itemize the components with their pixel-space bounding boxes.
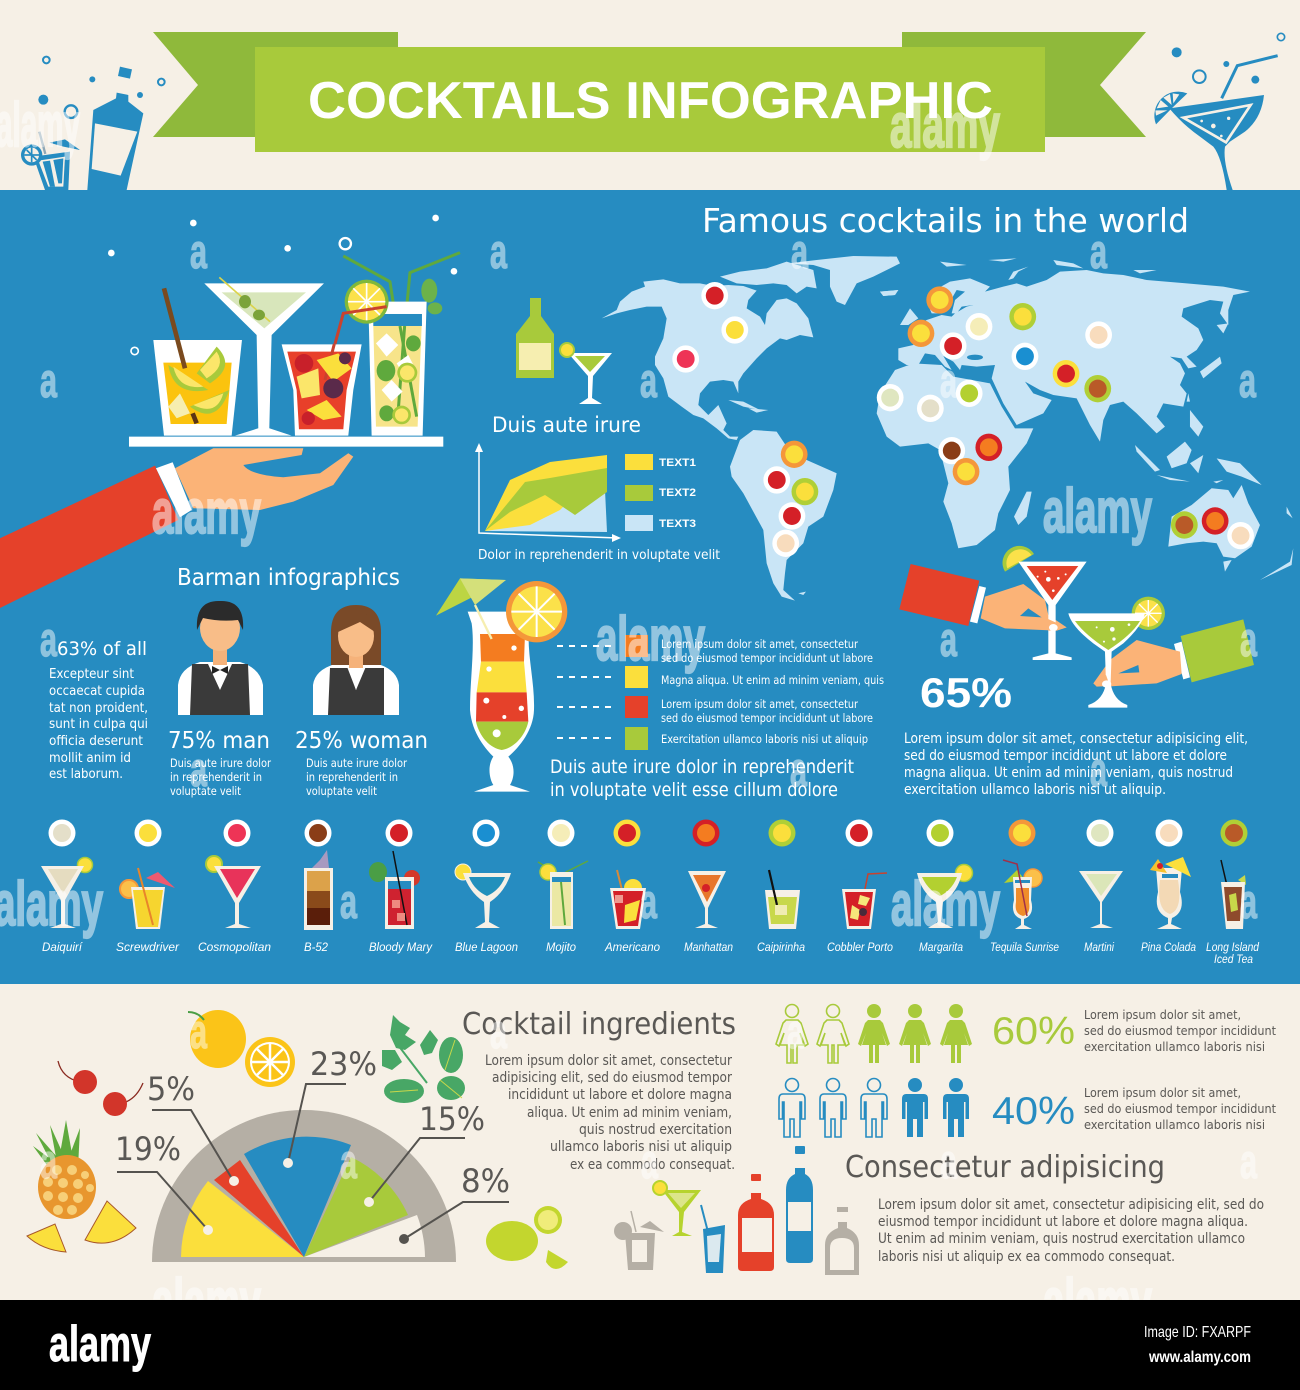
blue tumbler [701,1205,725,1273]
text block: consectetur: Ut enim ad minim veniam, quis nostrud exercitation ullamco [878,1231,1245,1247]
stock photo watermarks: a [940,355,957,408]
cocktail names: Blue Lagoon [455,942,518,954]
cocktail names: Margarita [919,942,963,954]
text block: 40% description [1084,1085,1277,1132]
cocktail names: Manhattan [684,942,733,954]
icon: lime and slices [486,1206,568,1269]
stock photo watermarks: alamy [891,870,1000,939]
pictogram row: women 60% [776,1004,972,1063]
icon: Manhattan [688,871,726,928]
stock photo watermarks: a [1090,744,1107,797]
text block: 63% of all: sunt in culpa qui [49,717,148,732]
bubbles [108,215,457,355]
stat: 60%: 60% [992,1010,1075,1053]
stat: 40%: 40% [992,1090,1075,1133]
chart caption: Dolor in reprehenderit in voluptate velit [478,547,720,563]
text block: 65% description: magna aliqua. Ut enim ad minim veniam, quis nostrud [904,765,1233,781]
text block: 63% of all [49,638,148,782]
map markers [672,282,1254,557]
text block: man description: in reprehenderit in [170,770,262,784]
cocktail names: Mojito [546,942,577,954]
legend text: Lorem ipsum dolor sit amet, consectetur [661,697,859,711]
text block: 63% of all: Excepteur sint [49,667,134,682]
title banner [153,32,1146,152]
stock photo watermarks: alamy [596,605,705,674]
gauge leader lines and dots [117,1084,509,1244]
stock photo watermarks: a [1240,614,1257,667]
gauge percentage labels: 23% [310,1045,377,1083]
stock photo watermarks: a [40,1136,57,1189]
footer black bar overlay [0,1300,1300,1390]
stock photo watermarks: alamy [0,91,80,160]
text block: woman description: Duis aute irure dolor [306,756,408,770]
heading: Barman infographics: Barman infographics [177,565,400,591]
stat: 25% woman: 25% woman [295,728,428,754]
chart heading icons: bottle and glass [516,298,612,404]
gauge percentage labels: 15% [419,1100,485,1138]
stat: 65%: 65% [920,669,1012,716]
area chart [475,443,621,542]
chart legend: TEXT2 [659,487,696,499]
icon: pineapple and wedges [27,1120,136,1252]
cocktail names: Martini [1084,942,1114,954]
chart legend: TEXT3 [659,518,696,530]
text block: woman description [306,756,408,798]
stock photo watermarks: a [190,744,207,797]
subheading under hurricane glass [550,756,854,801]
glass: martini with olives [204,277,324,436]
stock photo watermarks: a [490,1006,507,1059]
text block: ingredients: aliqua. Ut enim ad minim veniam, [527,1105,732,1121]
subheading under hurricane glass: Duis aute irure dolor in reprehenderit [550,756,854,778]
text block: ingredients: incididunt ut labore et dolore magna [508,1087,732,1103]
cocktail names: Pina Colada [1141,942,1196,954]
text block: consectetur: laboris nisi ut aliquip ex ea commodo consequat. [878,1249,1175,1265]
section heading: famous cocktails: Famous cocktails in the world [702,201,1189,240]
heading: consectetur adipisicing: Consectetur adipisicing [845,1150,1165,1185]
icon: orange and slice [188,1010,295,1087]
text block: woman description: in reprehenderit in [306,770,398,784]
world map [602,256,1293,601]
gray tumbler with umbrella [614,1211,664,1270]
stock photo watermarks: a [340,1136,357,1189]
red sleeve and hand [899,564,1067,631]
stock photo watermarks: a [340,876,357,929]
legend text: Lorem ipsum dolor sit amet, consectetur [661,637,859,651]
cocktail names: Long Island [1206,942,1260,954]
text block: 65% description: Lorem ipsum dolor sit amet, consectetur adipisicing elit, [904,731,1248,747]
legend: dashed leaders and colour swatches [557,635,648,750]
text block: consectetur: eiusmod tempor incididunt ut labore et dolore magna aliqua. [878,1214,1248,1230]
cocktail names: Bloody Mary [369,942,433,954]
text block: 63% of all: 63% of all [57,638,147,660]
stock photo watermarks: a [641,1136,658,1189]
icon: bottle and tumbler, header left [21,57,165,190]
cocktail names [42,942,1260,966]
chart legend: TEXT1 [659,457,696,469]
heading: Duis aute irure: Duis aute irure [492,413,641,437]
arm and hand [0,448,353,608]
stock photo watermarks: a [40,614,57,667]
stock photo watermarks: alamy [152,1267,261,1336]
cocktail colour key dots [48,820,1248,846]
glass: red fruit cocktail [282,344,362,436]
icons: bottles and glasses [614,1146,859,1275]
main title: COCKTAILS INFOGRAPHIC [308,72,993,130]
text block: 65% description [904,731,1248,798]
text block: 63% of all: tat non proident, [49,701,148,716]
icon: Bloody Mary [369,851,420,929]
legend text: sed do eiusmod tempor incididunt ut labore [661,651,873,665]
stock photo watermarks: a [40,355,57,408]
icon: Mojito [538,861,588,929]
icon: herbs and leaves [382,1015,465,1103]
gauge percentage labels: 5% [147,1070,195,1108]
icon: Martini [1079,871,1123,928]
cocktail names: Caipirinha [757,942,805,954]
footer: website: www.alamy.com [1148,1349,1251,1366]
legend text [661,637,884,746]
stock photo watermarks: a [190,226,207,279]
illustration: two hands toasting [899,546,1254,708]
text block: ingredients [485,1053,735,1173]
icon: Caipirinha [765,870,800,929]
icon: Tequila Sunrise [1003,860,1042,929]
green sleeve and hand [1093,619,1254,687]
text block: 60% description [1084,1007,1277,1054]
legend text: sed do eiusmod tempor incididunt ut labore [661,711,873,725]
icon: Margarita [917,864,972,928]
text block: 63% of all: officia deserunt [49,734,143,749]
gray bottle [825,1207,859,1275]
icon: Blue Lagoon [455,864,511,928]
illustration: layered hurricane glass [436,578,567,792]
stock photo watermarks: a [940,1136,957,1189]
lime margarita [653,1181,701,1236]
text block: 63% of all: est laborum. [49,767,123,782]
text block: ingredients: adipisicing elit, sed do eiusmod tempor [492,1070,733,1086]
text block: ingredients: ullamco laboris nisi ut aliquip [550,1139,732,1155]
icon: B-52 [304,850,333,930]
text block: woman description: voluptate velit [306,784,377,798]
blue bottle [786,1146,813,1263]
stock photo watermarks: a [1240,876,1257,929]
stock photo watermarks: a [190,1006,207,1059]
text block: 40% description: Lorem ipsum dolor sit amet, [1084,1085,1241,1100]
glass: caipirinha [153,288,242,436]
icon: Long Island Iced Tea [1221,860,1246,929]
cocktail names: Cosmopolitan [198,942,271,954]
text block: 40% description: exercitation ullamco laboris nisi [1084,1117,1265,1132]
text block: 65% description: sed do eiusmod tempor incididunt ut labore et dolore [904,748,1227,764]
cocktail names: Cobbler Porto [827,942,894,954]
cocktail names: B-52 [304,942,329,954]
footer: image id: Image ID: FXARPF [1144,1324,1251,1341]
red bottle [738,1174,774,1271]
gauge percentage labels: 19% [115,1130,181,1168]
stock photo watermarks: a [790,744,807,797]
icon: female barman [313,605,399,715]
stock photo watermarks: a [640,876,657,929]
stock photo watermarks: a [1240,1136,1257,1189]
cocktail names: Screwdriver [116,942,180,954]
stock photo watermarks: a [1090,226,1107,279]
map: Americas and Greenland [602,256,900,601]
text block: 60% description: Lorem ipsum dolor sit amet, [1084,1007,1241,1022]
illustration: tray of four cocktails on hand [0,215,460,608]
icon: Americano [610,870,646,929]
legend text: Exercitation ullamco laboris nisi ut aliquip [661,732,868,746]
stock photo watermarks: alamy [1043,477,1152,546]
text block: man description: voluptate velit [170,784,241,798]
stock photo watermarks: a [791,226,808,279]
icon: cherries [58,1061,143,1116]
text block: consectetur [878,1197,1264,1265]
stock photo watermarks: a [940,614,957,667]
cocktail names: Americano [604,942,661,954]
map: Eurasia, Africa, Oceania [877,258,1293,580]
stat: 75% man: 75% man [168,728,270,754]
legend text: Magna aliqua. Ut enim ad minim veniam, quis [661,673,884,687]
ingredients gauge chart [152,1110,456,1262]
stock photo watermarks: a [1239,355,1256,408]
lime margarita glass [1068,597,1165,708]
text block: 63% of all: occaecat cupida [49,684,145,699]
stock photo watermarks: alamy [890,92,1000,161]
text block: ingredients: Lorem ipsum dolor sit amet, consectetur [485,1053,733,1069]
text block: 60% description: exercitation ullamco laboris nisi [1084,1039,1265,1054]
text block: consectetur: Lorem ipsum dolor sit amet, consectetur adipisicing elit, sed do [878,1197,1264,1213]
text block: 40% description: sed do eiusmod tempor incididunt [1084,1101,1277,1116]
stock photo watermarks: alamy [1043,1267,1152,1336]
cocktail names: Daiquirí [42,942,84,954]
subheading under hurricane glass: in voluptate velit esse cillum dolore [550,779,838,801]
text block: man description [170,756,272,798]
text block: 65% description: exercitation ullamco laboris nisi ut aliquip. [904,782,1166,798]
stock photo watermarks: alamy [152,478,261,547]
red martini glass with lime [1003,546,1087,660]
heading: cocktail ingredients: Cocktail ingredients [462,1007,736,1042]
chart legend [625,454,696,531]
gauge percentage labels [115,1045,510,1200]
cocktail names: Tequila Sunrise [990,942,1059,954]
gauge percentage labels: 8% [461,1162,510,1200]
glass: mojito with straws, lemon [335,253,460,436]
stock photo watermarks: a [640,355,657,408]
footer: alamy logo: alamy [49,1316,151,1372]
pictogram row: men 40% [779,1078,969,1137]
cocktail names: Iced Tea [1214,954,1253,966]
icon: Cosmopolitan [206,856,261,928]
icon: margarita glass, header right [1154,33,1285,190]
icon: Screwdriver [120,868,175,929]
stock photo watermarks: a [787,1006,804,1059]
text block: ingredients: quis nostrud exercitation [579,1122,732,1138]
icon: Daiquiri [41,858,92,928]
tray [129,437,443,447]
icon: male barman [178,601,263,715]
text block: ingredients: ex ea commodo consequat. [570,1157,735,1173]
stock photo watermarks: a [490,226,507,279]
text block: man description: Duis aute irure dolor [170,756,272,770]
text block: 63% of all: mollit anim id [49,751,131,766]
text block: 60% description: sed do eiusmod tempor incididunt [1084,1023,1277,1038]
icon: Cobbler Porto [842,873,887,929]
icon: Pina Colada [1150,857,1191,929]
